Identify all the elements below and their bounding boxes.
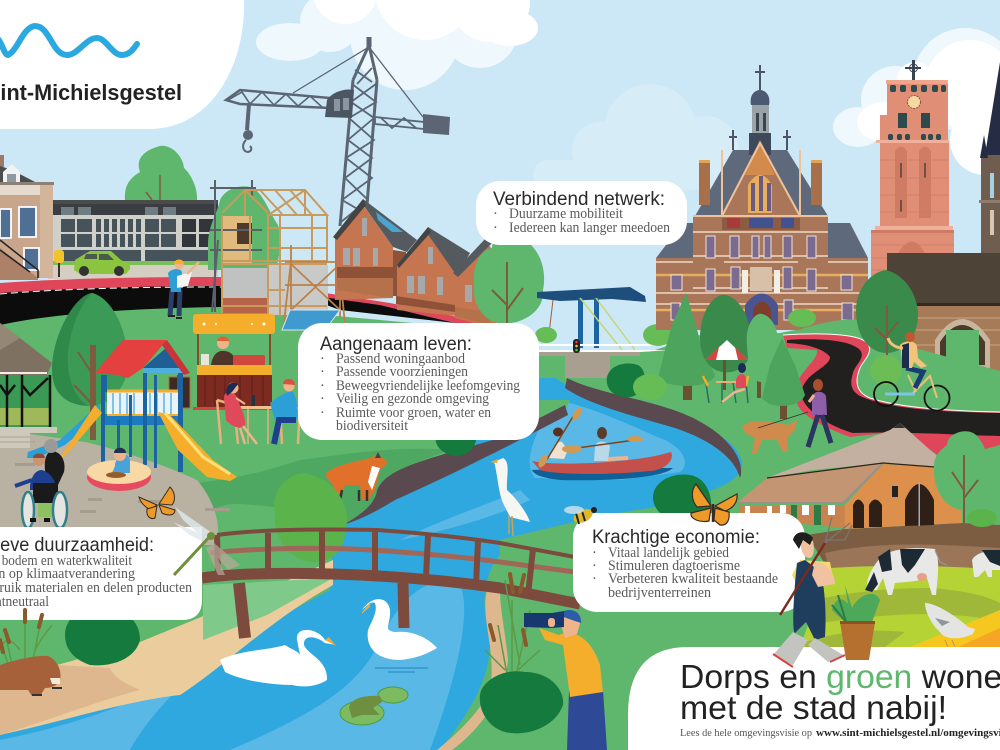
swan on water: [362, 599, 437, 672]
clouds: [256, 0, 1000, 190]
farm ground: [800, 523, 1000, 647]
panel: Aangenaam leven: Passend woningaanbod: [336, 351, 466, 367]
panel: Krachtige economie: Stimuleren dagtoerisme: [608, 558, 740, 574]
kayak with paddlers: [532, 406, 673, 480]
rock bank, right: [565, 378, 741, 478]
gate building: [887, 253, 1000, 372]
green ground: [0, 305, 1000, 750]
parking meter and green car: [54, 250, 130, 277]
cows and chicken: [865, 548, 1000, 647]
playground: [27, 340, 237, 481]
panel: Krachtige economie: Krachtige economie:: [592, 527, 760, 548]
panel: Aangenaam leven: ·: [320, 391, 325, 407]
tree by bridge: [474, 235, 544, 323]
tree by farmhouse: [934, 431, 997, 527]
panel: Aangenaam leven: Passende voorzieningen: [336, 364, 469, 380]
construction worker: [168, 260, 199, 318]
panel: Aangenaam leven: Ruimte voor groen, water en: [336, 405, 492, 421]
icon: logo wave: [0, 26, 137, 55]
fox: [326, 452, 388, 501]
panel: Krachtige economie: [573, 513, 805, 612]
historic house: [0, 155, 54, 280]
dark church: [979, 62, 1000, 255]
sandbox with child: [87, 448, 151, 491]
bee: [564, 506, 597, 526]
panel: Verbindend netwerk: Duurzame mobiliteit: [509, 206, 623, 222]
vegetable basket: [832, 585, 880, 660]
drawbridge: [535, 287, 673, 378]
panel: Aangenaam leven: ·: [320, 351, 325, 367]
panel: Aangenaam leven: ·: [320, 378, 325, 394]
sandy shore: [0, 560, 508, 750]
office building: [48, 200, 218, 279]
crane: [226, 37, 450, 226]
farmhouse barn: [737, 423, 962, 529]
bushes, right: [607, 364, 711, 513]
panel: Krachtige economie: Verbeteren kwaliteit bestaande: [608, 571, 778, 587]
cyclist: [874, 332, 950, 410]
egret: [490, 458, 530, 536]
green river banks and water: [0, 378, 742, 750]
row of trees with terrace: [658, 293, 805, 419]
reeds by photographer: [485, 574, 540, 680]
panel: Krachtige economie: bedrijventerreinen: [608, 585, 712, 601]
panel: slogan: [628, 647, 1000, 750]
wheelchair group: [15, 439, 67, 528]
panel: Krachtige economie: ·: [592, 558, 597, 574]
swan with open wing: [220, 630, 336, 686]
green island by river: [538, 400, 570, 420]
beaver: [0, 656, 62, 696]
wooden footbridge: [202, 530, 580, 638]
rock bank, left: [343, 405, 568, 525]
panel: Verbindend netwerk: [476, 181, 687, 245]
salmon church tower: [871, 60, 954, 292]
panel: Aangenaam leven: Veilig en gezonde omgeving: [336, 391, 489, 407]
green bank under kayak: [470, 475, 1000, 750]
panel: Actieve duurzaamheid: [0, 527, 202, 620]
brick row houses: [333, 199, 500, 330]
cycle road, right: [783, 334, 1000, 460]
panel: Krachtige economie: Vitaal landelijk gebied: [608, 545, 730, 561]
bushes, left and middle: [65, 424, 476, 665]
panel: slogan: met de stad nabij!: [680, 689, 947, 726]
butterfly, plaza: [139, 487, 175, 519]
bike lane and road, left: [0, 277, 487, 325]
photographer: [524, 610, 607, 750]
darker meadow: [197, 449, 450, 525]
dragonfly: [173, 507, 240, 575]
dog walker: [742, 379, 831, 453]
panel: Aangenaam leven: biodiversiteit: [336, 418, 408, 434]
panel: Aangenaam leven: Beweegvriendelijke leefomgeving: [336, 378, 520, 394]
panel: Krachtige economie: ·: [592, 571, 597, 587]
background tree behind offices: [125, 146, 197, 200]
dark green tree by playground: [52, 293, 128, 440]
terrace couple: [217, 379, 300, 444]
panel: logo: [0, 0, 244, 129]
green hill, right: [640, 320, 1000, 560]
panel: Krachtige economie: ·: [592, 545, 597, 561]
gazebo and plaza: [0, 323, 230, 545]
panel: Verbindend netwerk: ·: [493, 206, 498, 222]
town hall: [656, 65, 868, 330]
farmer: [773, 517, 852, 667]
panel: Verbindend netwerk: Iedereen kan langer meedoen: [509, 220, 671, 236]
lily pads and frog: [340, 687, 408, 725]
panel: Aangenaam leven: [298, 323, 539, 440]
dark tree by gate: [856, 270, 918, 385]
panel: Aangenaam leven: ·: [320, 405, 325, 421]
panel: Verbindend netwerk: ·: [493, 220, 498, 236]
scaffolded timber frame house: [208, 180, 345, 330]
panel: Aangenaam leven: Aangenaam leven:: [320, 334, 472, 355]
reeds, left: [0, 610, 52, 670]
butterfly, panel top: [691, 484, 737, 525]
panel: slogan: Lees de hele omgevingsvisie op: [680, 728, 812, 739]
panel: Aangenaam leven: ·: [320, 364, 325, 380]
panel: slogan: www.sint-michielsgestel.nl/omgevingsvisie: [816, 728, 1000, 739]
bush by photographer: [480, 671, 563, 733]
food stall: [169, 314, 275, 410]
panel: Verbindend netwerk: Verbindend netwerk:: [493, 189, 665, 210]
